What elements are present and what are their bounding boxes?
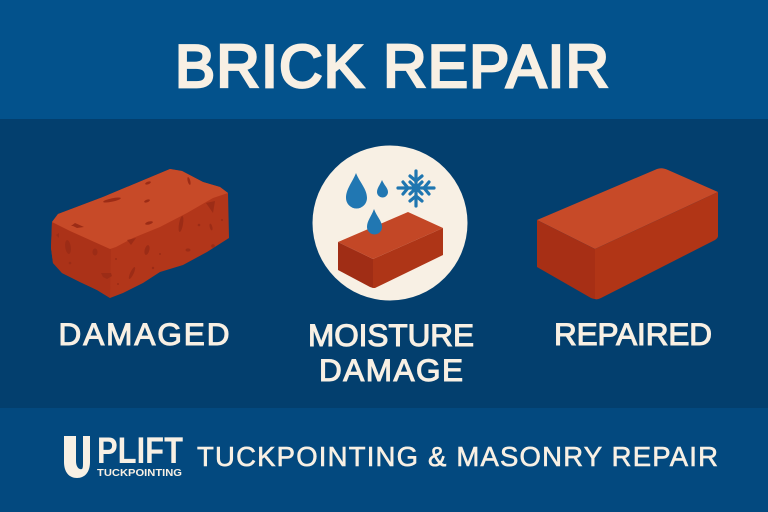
icon: large water drop [346, 173, 367, 208]
logo U [64, 436, 90, 478]
logo: uplift tuckpointing [64, 430, 183, 479]
logo subtitle: TUCKPOINTING [97, 467, 182, 479]
footer tagline: TUCKPOINTING & MASONRY REPAIR [197, 441, 718, 472]
main panel [0, 119, 768, 408]
label: damaged: DAMAGED [58, 316, 230, 352]
repaired brick [537, 168, 718, 299]
header band [0, 0, 768, 119]
moisture circle icon [312, 146, 468, 300]
damaged brick [51, 169, 229, 298]
label: moisture damage: DAMAGE [319, 352, 463, 388]
cream circle [312, 146, 468, 300]
label: repaired: REPAIRED [554, 316, 712, 352]
damage pits [56, 177, 223, 285]
icon: water drop on brick [367, 209, 382, 235]
label: moisture damage: MOISTURE [308, 317, 474, 353]
logo wordmark: PLIFT [97, 430, 183, 471]
title: BRICK REPAIR [175, 33, 609, 100]
small brick [338, 212, 443, 288]
icon: snowflake [398, 171, 434, 206]
footer band [0, 408, 768, 512]
label: moisture damage [308, 317, 474, 388]
icon: small water drop [377, 180, 388, 198]
